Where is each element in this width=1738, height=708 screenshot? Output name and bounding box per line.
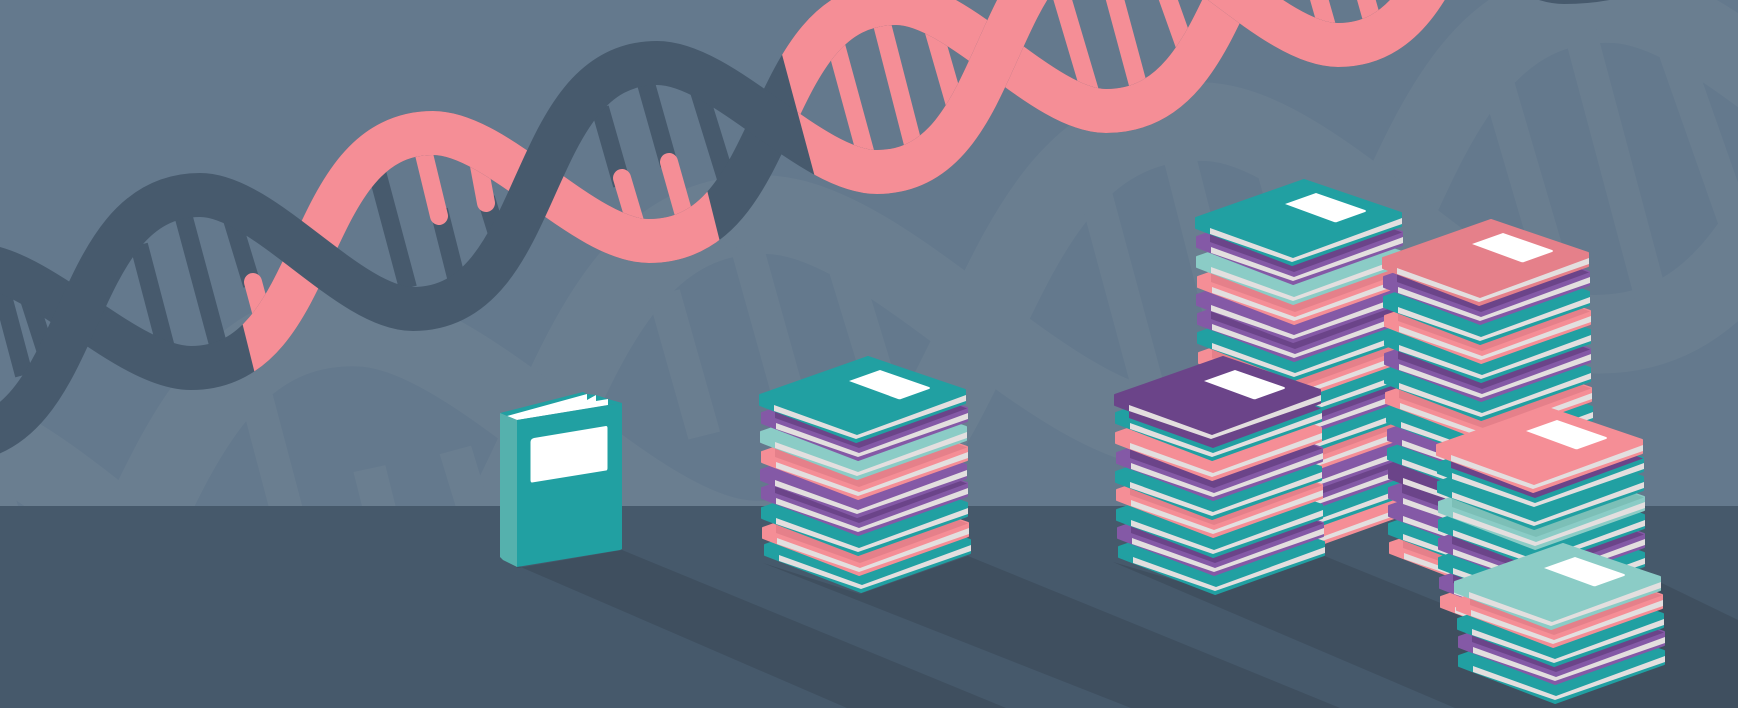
book stack: tall back stack: [1196, 180, 1409, 552]
floor shadows: [500, 550, 1738, 708]
book stack: tall rose-topped stack: [1383, 220, 1596, 590]
back strand: [0, 0, 1738, 368]
book stack: pink-topped stack: [1437, 407, 1647, 644]
book stack: purple-topped stack: [1115, 357, 1325, 594]
DNA double helix: [0, 0, 1738, 441]
book stack: front-left stack: [760, 357, 971, 592]
background wall: [0, 0, 1738, 510]
book stack: light-teal-topped stack: [1455, 544, 1665, 703]
DNA rungs: [0, 0, 1374, 375]
single upright book: [500, 392, 622, 567]
front strand: [0, 0, 1580, 441]
floor: [0, 506, 1738, 708]
